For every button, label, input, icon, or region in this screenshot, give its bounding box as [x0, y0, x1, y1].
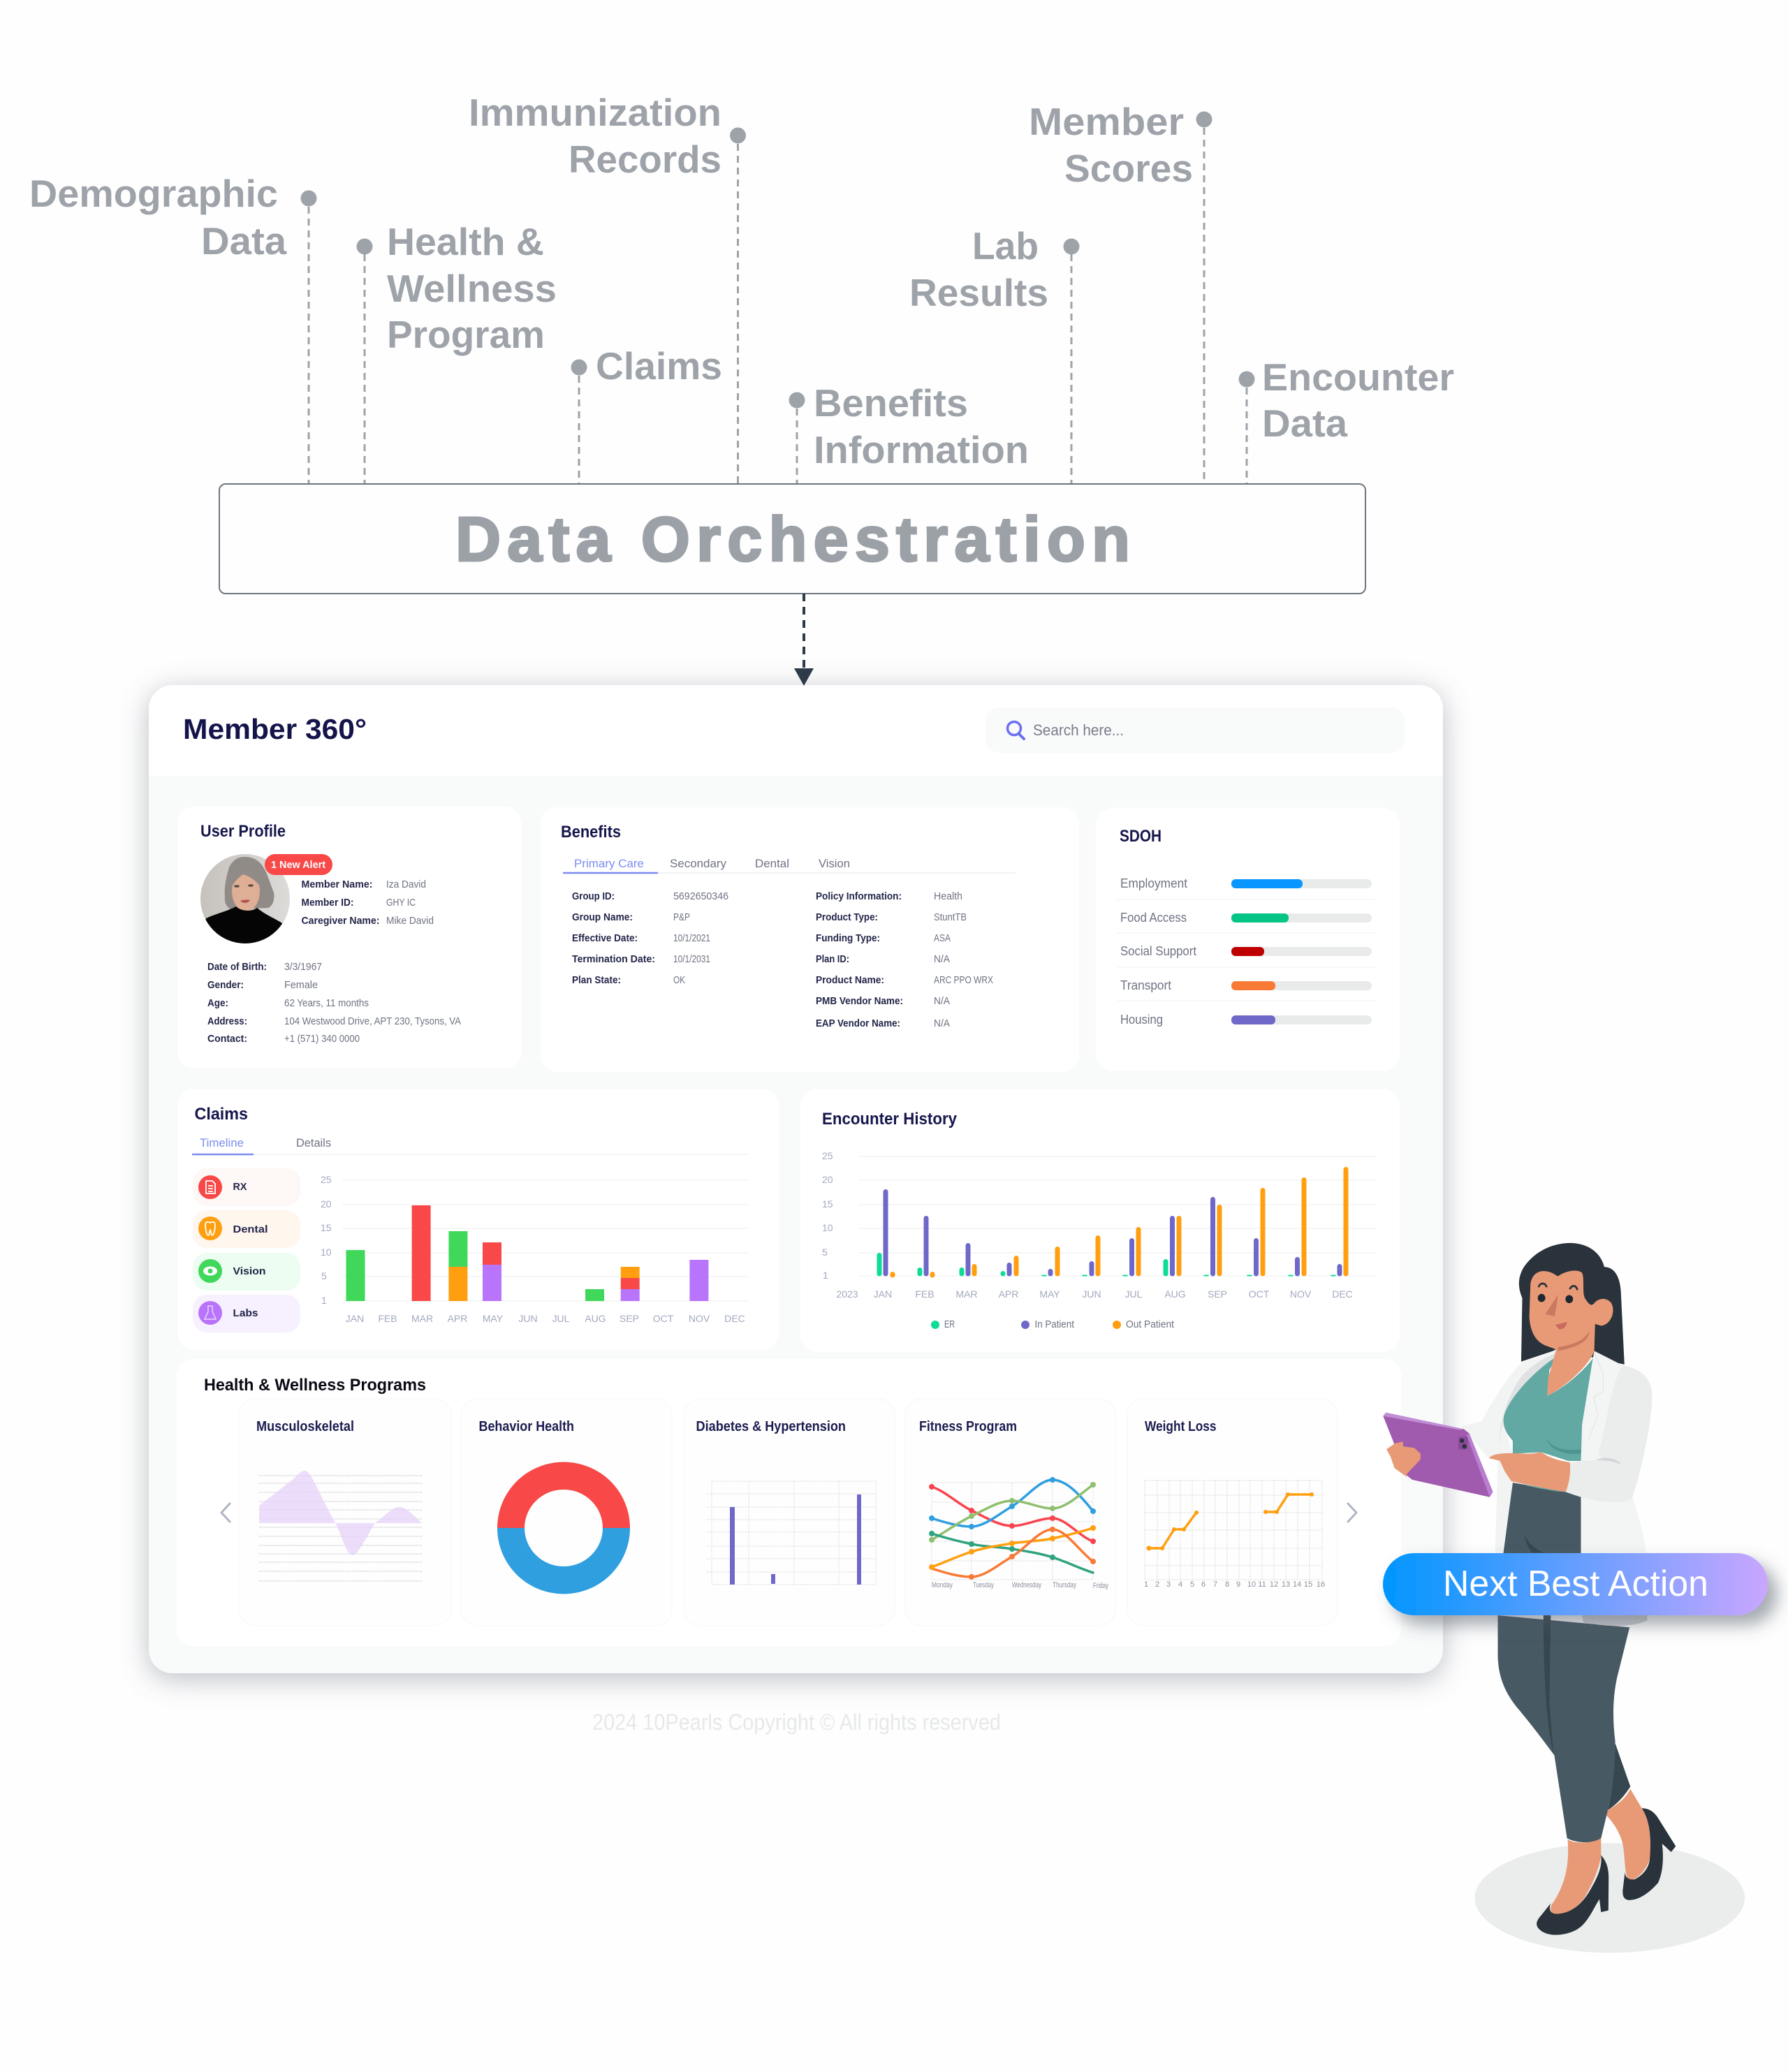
- encounter y axis: 25: [822, 1150, 833, 1161]
- day axis: 5: [1190, 1580, 1194, 1589]
- member personal details: 104 Westwood Drive, APT 230, Tysons, VA: [284, 1015, 461, 1027]
- member identity fields: Member ID:: [302, 897, 353, 909]
- heading: health and wellness programs: Health & Wellness Programs: [204, 1376, 426, 1395]
- day axis: [1144, 1580, 1325, 1589]
- claims month axis: FEB: [378, 1313, 397, 1324]
- copyright: 2024 10Pearls Copyright © All rights reserved: [592, 1710, 1001, 1735]
- benefits right column: N/A: [934, 1017, 950, 1029]
- heading: encounter history: Encounter History: [822, 1110, 958, 1129]
- claims month axis: APR: [448, 1313, 467, 1324]
- member photo: [200, 854, 290, 943]
- data source: immunization records: Records: [569, 138, 721, 181]
- claim type: vision: Vision: [233, 1265, 265, 1277]
- weekday axis: Friday: [1093, 1582, 1108, 1590]
- heading: user profile: User Profile: [200, 822, 286, 841]
- bar chart: [730, 1494, 861, 1585]
- tablet: [1383, 1413, 1493, 1497]
- data source: lab results: [909, 224, 1080, 484]
- panel: benefits: [541, 807, 1079, 1072]
- day axis: 4: [1178, 1580, 1182, 1589]
- claims y axis: 1: [321, 1295, 327, 1306]
- encounter month axis: MAY: [1039, 1288, 1060, 1300]
- data source: demographic data: [29, 172, 317, 484]
- data source: health and wellness program: Health &: [387, 220, 544, 263]
- claim type: RX: RX: [233, 1181, 247, 1193]
- panel: health and wellness programs: [177, 1359, 1401, 1646]
- card: weight loss: Weight Loss: [1145, 1419, 1217, 1434]
- SDOH row: housing: [1120, 1013, 1372, 1027]
- illustration: doctor with tablet: [1383, 1243, 1745, 1953]
- card: musculoskeletal: [239, 1399, 451, 1626]
- claims y axis: 20: [321, 1198, 332, 1210]
- member identity fields: Caregiver Name:: [302, 915, 380, 927]
- day axis: 10: [1247, 1580, 1256, 1589]
- encounter month axis: JAN: [874, 1288, 892, 1300]
- encounter legend: ER: [944, 1318, 955, 1330]
- member personal details: Age:: [207, 997, 228, 1009]
- member personal details: Contact:: [207, 1033, 247, 1045]
- data source: encounter data: Data: [1262, 402, 1347, 445]
- claim type: dental: [193, 1210, 300, 1248]
- data source: encounter data: [1239, 355, 1454, 484]
- heading: claims: Claims: [194, 1105, 248, 1124]
- claims stacked bar chart: [346, 1205, 708, 1301]
- member identity fields: [302, 879, 434, 927]
- claims month axis: JAN: [346, 1313, 364, 1324]
- member identity fields: Mike David: [386, 915, 434, 927]
- SDOH row: food access: Food Access: [1120, 911, 1187, 925]
- claims month axis: MAR: [411, 1313, 433, 1324]
- card: musculoskeletal: Musculoskeletal: [256, 1419, 354, 1434]
- encounter y axis: 20: [822, 1174, 833, 1185]
- card: fitness program: [905, 1399, 1116, 1626]
- encounter month axis: AUG: [1164, 1288, 1186, 1300]
- benefits tabs: Dental: [755, 857, 789, 870]
- benefits right column: ARC PPO WRX: [934, 974, 993, 986]
- data source: claims: Claims: [596, 344, 722, 388]
- benefits right column: [816, 890, 993, 1029]
- member personal details: +1 (571) 340 0000: [284, 1033, 360, 1045]
- encounter y axis: [822, 1150, 833, 1281]
- data source: encounter data: Encounter: [1262, 355, 1454, 399]
- encounter month axis: OCT: [1249, 1288, 1270, 1300]
- encounter legend: In Patient: [1035, 1318, 1075, 1330]
- claims month axis: DEC: [724, 1313, 745, 1324]
- weekday axis: Tuesday: [973, 1581, 994, 1589]
- data source: health and wellness program: Program: [387, 313, 545, 356]
- encounter month axis: FEB: [915, 1288, 935, 1300]
- claims tabs: Timeline: [200, 1136, 244, 1149]
- encounter y axis: 5: [822, 1247, 828, 1258]
- day axis: 13: [1282, 1580, 1290, 1589]
- day axis: 1: [1144, 1580, 1148, 1589]
- day axis: 16: [1317, 1580, 1325, 1589]
- SDOH row: food access: [1120, 911, 1372, 925]
- data source: immunization records: [469, 91, 746, 484]
- claim type: labs: Labs: [233, 1307, 258, 1319]
- day axis: 11: [1258, 1580, 1266, 1589]
- carousel arrow left: [221, 1504, 230, 1522]
- heading: benefits: Benefits: [561, 823, 621, 842]
- SDOH row: employment: [1120, 876, 1372, 890]
- benefits left column: 10/1/2031: [673, 953, 710, 965]
- benefits right column: Funding Type:: [816, 932, 880, 944]
- arrow: orchestration to dashboard: [794, 594, 814, 686]
- benefits left column: Effective Date:: [572, 932, 638, 944]
- encounter month axis: SEP: [1208, 1288, 1227, 1300]
- member personal details: Female: [284, 979, 318, 991]
- member personal details: 3/3/1967: [284, 961, 322, 973]
- step line chart: [1147, 1492, 1314, 1550]
- benefits right column: N/A: [934, 995, 950, 1007]
- member identity fields: Iza David: [386, 879, 426, 890]
- day axis: 7: [1213, 1580, 1217, 1589]
- data source: benefits information: Information: [814, 428, 1029, 471]
- bars: ER series: [879, 1256, 1335, 1275]
- data source: member scores: Scores: [1064, 147, 1193, 190]
- SDOH row: housing: Housing: [1120, 1013, 1163, 1027]
- encounter month axis: NOV: [1290, 1288, 1312, 1300]
- card: fitness program: Fitness Program: [919, 1419, 1017, 1434]
- SDOH row: transport: [1120, 978, 1372, 992]
- data source: benefits information: Benefits: [814, 381, 968, 425]
- data source: lab results: Lab: [972, 224, 1039, 267]
- SDOH row: social support: Social Support: [1120, 944, 1196, 958]
- panel: claims: [177, 1089, 779, 1350]
- day axis: 3: [1166, 1580, 1171, 1589]
- data orchestration box: Data Orchestration: [455, 505, 1130, 575]
- benefits right column: Health: [934, 890, 962, 902]
- member personal details: Address:: [207, 1015, 247, 1027]
- encounter month axis: JUL: [1125, 1288, 1143, 1300]
- area chart: [259, 1471, 422, 1555]
- day axis: 12: [1270, 1580, 1278, 1589]
- claims month axis: [346, 1313, 745, 1324]
- encounter y axis: 1: [823, 1270, 828, 1281]
- benefits right column: EAP Vendor Name:: [816, 1017, 900, 1029]
- member personal details: Gender:: [207, 979, 244, 991]
- encounter month axis: APR: [999, 1288, 1018, 1300]
- card: diabetes and hypertension: [684, 1399, 895, 1626]
- panel: encounter history: [800, 1089, 1400, 1352]
- card: behavior health: Behavior Health: [479, 1419, 574, 1434]
- ground shadow and legs: [1474, 1615, 1745, 1953]
- claim type: dental: Dental: [233, 1224, 268, 1235]
- panel: SDOH: [1096, 808, 1400, 1071]
- card: diabetes and hypertension: Diabetes & Hypertension: [696, 1419, 846, 1434]
- benefits right column: PMB Vendor Name:: [816, 995, 903, 1007]
- data source: lab results: Results: [909, 271, 1048, 314]
- data source: demographic data: Data: [201, 219, 286, 263]
- claims month axis: OCT: [653, 1313, 674, 1324]
- claims y axis: 25: [321, 1174, 332, 1185]
- benefits right column: Product Type:: [816, 911, 878, 923]
- day axis: 15: [1304, 1580, 1312, 1589]
- data source: member scores: [1029, 100, 1212, 484]
- day axis: 8: [1225, 1580, 1229, 1589]
- alert badge: 1 New Alert: [271, 859, 325, 871]
- data source: immunization records: Immunization: [469, 91, 721, 134]
- upper body: [1383, 1243, 1652, 1558]
- member personal details: 62 Years, 11 months: [284, 997, 369, 1009]
- claims month axis: MAY: [483, 1313, 504, 1324]
- benefits left column: OK: [673, 974, 685, 986]
- benefits left column: Termination Date:: [572, 953, 655, 965]
- heading: SDOH: SDOH: [1120, 827, 1162, 846]
- search box: [985, 707, 1405, 753]
- alert badge: [265, 854, 332, 875]
- weekday axis: Monday: [932, 1581, 953, 1589]
- data source: demographic data: Demographic: [29, 172, 278, 215]
- benefits tabs: Vision: [819, 857, 850, 870]
- benefits right column: Product Name:: [816, 974, 884, 986]
- claims y axis: [321, 1174, 332, 1306]
- encounter month axis: JUN: [1082, 1288, 1101, 1300]
- benefits right column: N/A: [934, 953, 950, 965]
- benefits right column: Policy Information:: [816, 890, 902, 902]
- weekday axis: [932, 1581, 1108, 1590]
- benefits tabs: Secondary: [670, 857, 726, 870]
- benefits right column: Plan ID:: [816, 953, 849, 965]
- claims tabs: [192, 1136, 748, 1154]
- data source: claims: [571, 344, 722, 484]
- claims month axis: JUL: [552, 1313, 570, 1324]
- benefits right column: ASA: [934, 932, 951, 944]
- day axis: 2: [1155, 1580, 1159, 1589]
- day axis: 14: [1293, 1580, 1301, 1589]
- benefits left column: P&P: [673, 911, 690, 923]
- carousel arrow right: [1348, 1504, 1356, 1522]
- benefits right column: StuntTB: [934, 911, 967, 923]
- benefits left column: 10/1/2021: [673, 932, 710, 944]
- benefits tabs: Primary Care: [574, 857, 644, 870]
- bars: in patient series: [886, 1191, 1340, 1274]
- SDOH row: employment: Employment: [1120, 876, 1187, 890]
- claims month axis: JUN: [518, 1313, 538, 1324]
- member identity fields: GHY IC: [386, 897, 416, 909]
- bars: out patient series: [893, 1169, 1346, 1275]
- claim type: labs: [193, 1295, 300, 1332]
- data orchestration box: [219, 484, 1365, 594]
- encounter month axis: MAR: [955, 1288, 978, 1300]
- weekday axis: Wednesday: [1012, 1581, 1041, 1589]
- SDOH row: social support: [1120, 944, 1372, 958]
- search box: Search here...: [1033, 721, 1124, 739]
- weekday axis: Thursday: [1053, 1581, 1076, 1589]
- benefits left column: Plan State:: [572, 974, 621, 986]
- encounter y axis: 10: [822, 1222, 833, 1233]
- claims y axis: 10: [321, 1247, 332, 1258]
- encounter month axis: 2023: [836, 1288, 858, 1300]
- encounter y axis: 15: [822, 1198, 833, 1210]
- member personal details: Date of Birth:: [207, 961, 267, 973]
- claims month axis: NOV: [689, 1313, 710, 1324]
- benefits left column: [572, 890, 728, 986]
- encounter month axis: DEC: [1332, 1288, 1353, 1300]
- claims month axis: SEP: [620, 1313, 639, 1324]
- benefits tabs: [563, 857, 1016, 873]
- encounter legend: Out Patient: [1126, 1318, 1175, 1330]
- data source: benefits information: [789, 381, 1029, 484]
- SDOH row: transport: Transport: [1120, 978, 1171, 992]
- encounter month axis: [836, 1288, 1353, 1300]
- claims y axis: 5: [321, 1270, 327, 1281]
- benefits left column: Group Name:: [572, 911, 633, 923]
- benefits left column: 5692650346: [673, 890, 728, 902]
- claims y axis: 15: [321, 1222, 332, 1233]
- data source: member scores: Member: [1029, 100, 1184, 143]
- member personal details: [207, 961, 461, 1045]
- claims tabs: Details: [296, 1136, 331, 1149]
- claims month axis: AUG: [585, 1313, 606, 1324]
- next best action button: [1383, 1553, 1768, 1615]
- multi line chart: [929, 1477, 1096, 1580]
- card: behavior health: [461, 1399, 672, 1626]
- main dashboard card: [149, 685, 1443, 1673]
- donut chart: [497, 1462, 630, 1594]
- member identity fields: Member Name:: [302, 879, 373, 890]
- claim type: vision: [193, 1253, 300, 1291]
- page title: Member 360°: [183, 713, 367, 745]
- card: weight loss: [1127, 1399, 1338, 1626]
- data source: health and wellness program: [356, 220, 557, 484]
- panel: user profile: [200, 824, 461, 1044]
- claim type: RX: [193, 1168, 300, 1206]
- benefits left column: Group ID:: [572, 890, 615, 902]
- day axis: 6: [1201, 1580, 1206, 1589]
- day axis: 9: [1236, 1580, 1240, 1589]
- encounter legend: [931, 1318, 1175, 1330]
- data source: health and wellness program: Wellness: [387, 267, 557, 310]
- next best action button: Next Best Action: [1443, 1564, 1708, 1604]
